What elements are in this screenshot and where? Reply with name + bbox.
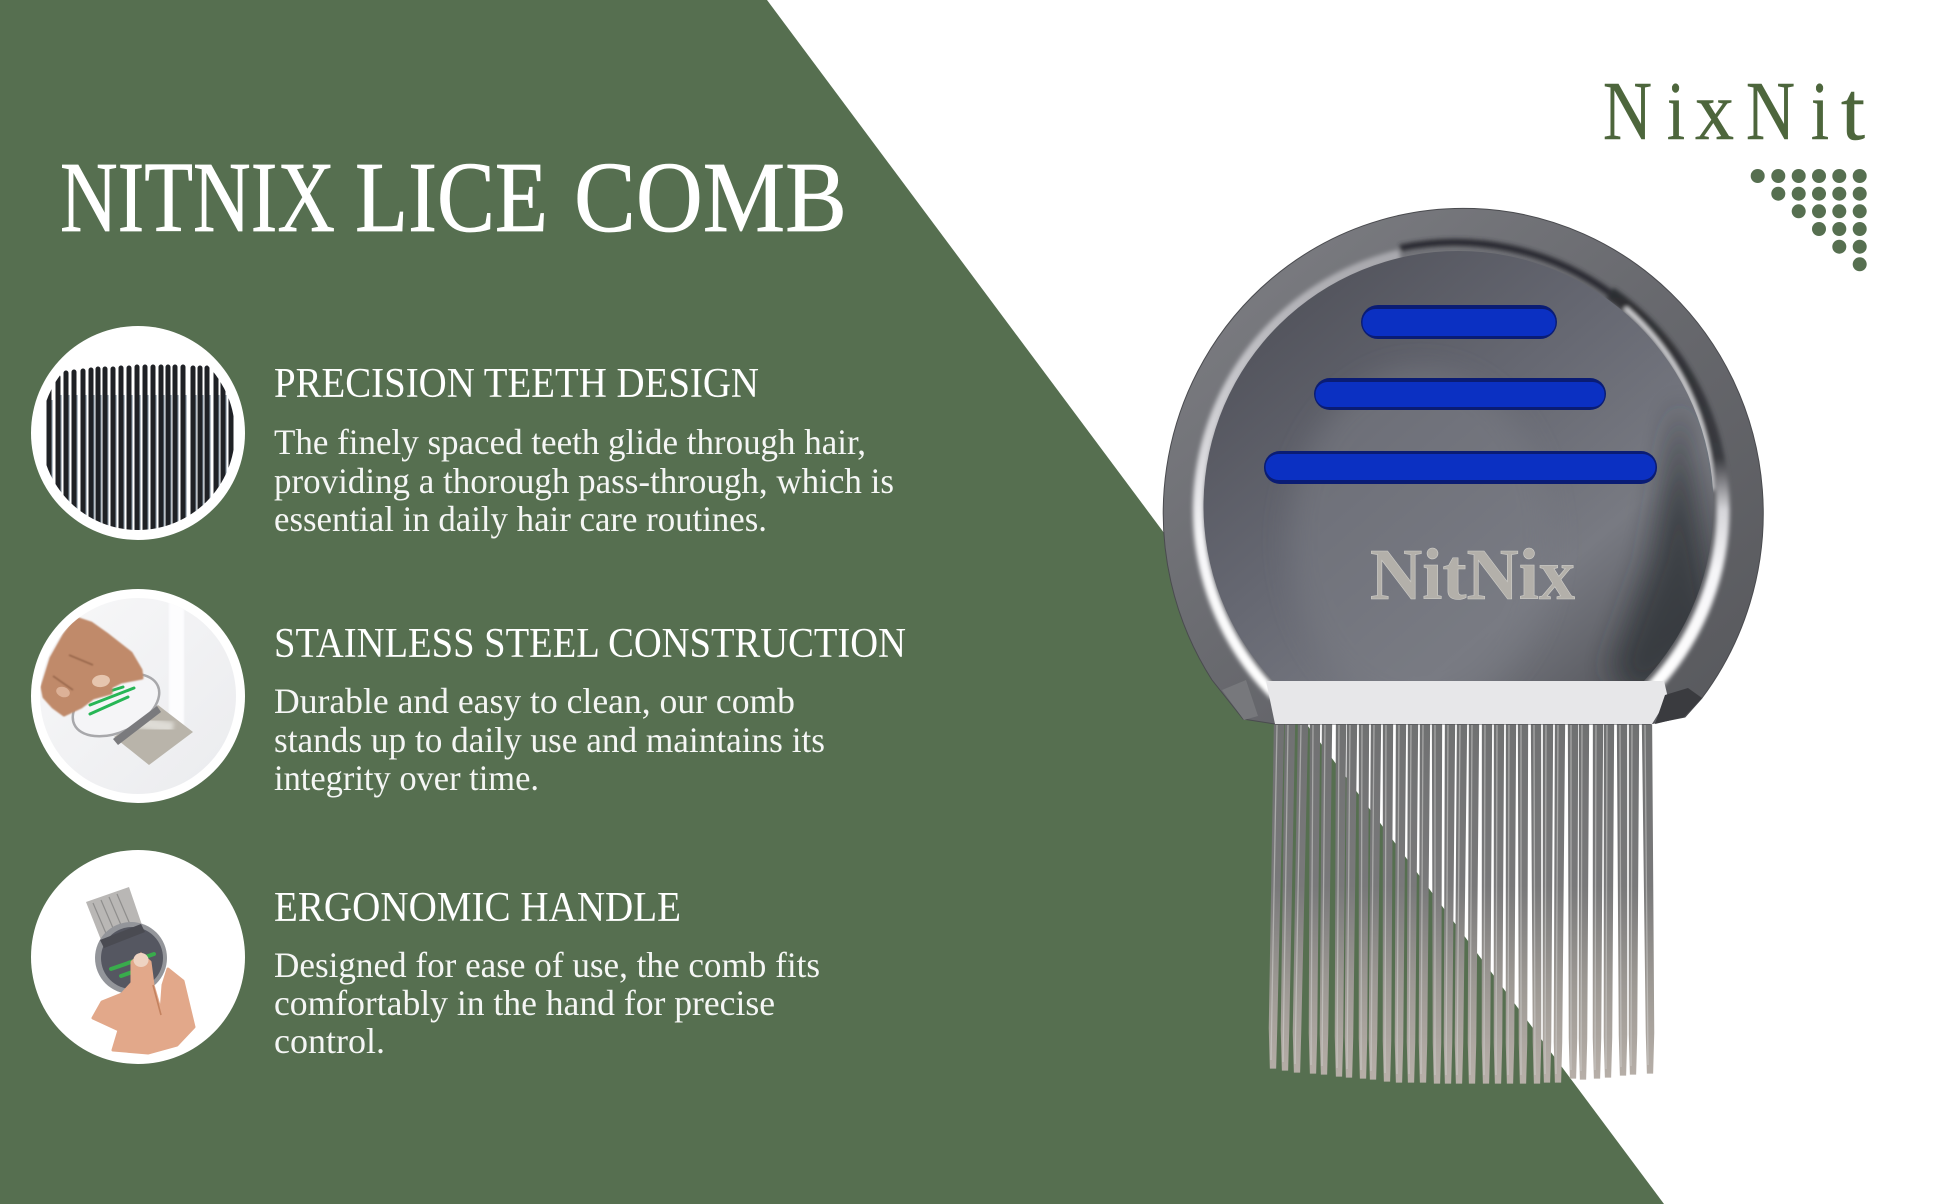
comb head xyxy=(1163,208,1763,724)
body text xyxy=(274,681,825,798)
white bottom band xyxy=(1266,681,1668,724)
product image: lice comb xyxy=(1163,208,1763,1083)
heading: STAINLESS STEEL CONSTRUCTION xyxy=(274,621,906,667)
heading: PRECISION TEETH DESIGN xyxy=(274,361,759,407)
logo wordmark: i xyxy=(1811,65,1829,158)
brand logo NixNit xyxy=(1603,65,1867,271)
feature 3: ergonomic handle xyxy=(31,850,820,1064)
blue slots xyxy=(1264,305,1657,484)
inner dish xyxy=(1204,251,1714,682)
title: LICE xyxy=(355,141,548,253)
comb teeth xyxy=(1269,725,1654,1083)
body text: comfortably in the hand for precise xyxy=(274,983,775,1023)
body text xyxy=(274,945,820,1061)
title xyxy=(60,141,847,253)
body text: Designed for ease of use, the comb fits xyxy=(274,945,820,985)
body text: providing a thorough pass-through, which is xyxy=(274,461,894,501)
feature 1: precision teeth design xyxy=(31,326,894,540)
title: COMB xyxy=(574,141,847,253)
rim highlights xyxy=(1198,242,1723,695)
logo wordmark: N xyxy=(1603,65,1652,158)
photo circle: comb under running water xyxy=(31,589,245,803)
body text: control. xyxy=(274,1021,385,1061)
body text: The finely spaced teeth glide through hair, xyxy=(274,422,866,462)
engraved brand name: NitNix xyxy=(1370,534,1575,615)
photo circle: close-up of teeth xyxy=(31,326,245,540)
logo wordmark xyxy=(1603,65,1865,158)
photo circle: comb held in hand xyxy=(31,850,245,1064)
logo dot triangle xyxy=(1751,169,1867,271)
body text xyxy=(274,422,894,539)
logo wordmark: t xyxy=(1841,65,1865,158)
dark corner wedges xyxy=(1655,688,1702,724)
logo wordmark: x xyxy=(1695,65,1734,158)
feature 2: stainless steel construction xyxy=(31,589,906,803)
outer metal rim xyxy=(1163,208,1763,724)
title: NITNIX xyxy=(60,141,335,253)
body text: stands up to daily use and maintains its xyxy=(274,720,825,760)
body text: Durable and easy to clean, our comb xyxy=(274,681,795,721)
heading: ERGONOMIC HANDLE xyxy=(274,885,681,931)
logo wordmark: N xyxy=(1746,65,1795,158)
body text: integrity over time. xyxy=(274,758,539,798)
logo wordmark: i xyxy=(1667,65,1685,158)
body text: essential in daily hair care routines. xyxy=(274,499,767,539)
